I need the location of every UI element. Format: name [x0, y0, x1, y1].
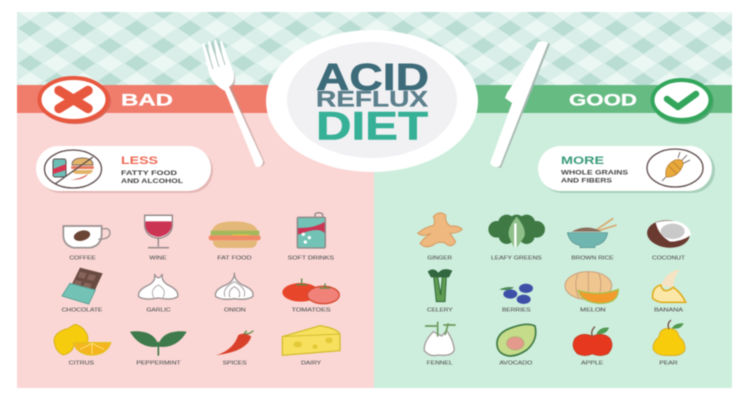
icon: apple: [573, 327, 612, 366]
icon: dairy: DAIRY: [301, 360, 322, 366]
icon: soft drink: [288, 213, 335, 262]
icon: soft drink: SOFT DRINKS: [288, 256, 335, 262]
icon: banana: [653, 269, 686, 313]
icon: garlic: GARLIC: [146, 307, 171, 313]
icon: peppermint: PEPPERMINT: [136, 360, 182, 366]
icon: brown rice: [567, 218, 617, 262]
title: [316, 57, 429, 148]
icon: berries: BERRIES: [502, 307, 531, 313]
icon: leafy greens: [488, 215, 545, 262]
plate: [266, 30, 478, 172]
title: ACID: [316, 57, 429, 99]
icon: burger: FAT FOOD: [217, 256, 252, 262]
less description: FATTY FOOD: [121, 170, 177, 177]
icon: banana: BANANA: [654, 307, 684, 313]
icon: ginger: [418, 213, 462, 262]
icon: celery: CELERY: [427, 307, 453, 313]
icon: dairy: [282, 326, 340, 366]
icon: coffee: COFFEE: [69, 256, 96, 262]
icon: leafy greens: LEAFY GREENS: [491, 256, 542, 262]
icon: crossed-out fatty food: [44, 150, 102, 188]
icon: knife: [490, 41, 550, 168]
panel: foods to avoid: [54, 213, 340, 366]
more heading: MORE: [561, 155, 604, 167]
icon: pear: PEAR: [659, 360, 678, 366]
callout: less: [36, 146, 213, 193]
icon: fennel: [424, 322, 456, 366]
icon: spices: SPICES: [223, 360, 247, 366]
icon: ginger: GINGER: [427, 256, 452, 262]
icon: coconut: [646, 219, 691, 262]
icon: tomatoes: [282, 278, 339, 313]
bad label: BAD: [121, 90, 173, 110]
icon: coconut: COCONUT: [652, 256, 686, 262]
icon: brown rice: BROWN RICE: [571, 256, 614, 262]
icon: citrus: [54, 324, 111, 366]
icon: fennel: FENNEL: [427, 360, 453, 366]
callout: more: [538, 146, 715, 193]
icon: apple: APPLE: [581, 360, 604, 366]
icon: fork: [202, 40, 265, 167]
icon: wine: [145, 215, 172, 262]
icon: avocado: [497, 324, 536, 366]
title: REFLUX: [316, 86, 428, 112]
icon: coffee: [63, 226, 110, 262]
icon: garlic: [138, 274, 178, 313]
icon: pear: [653, 320, 685, 366]
good label: GOOD: [569, 90, 637, 110]
more description: AND FIBERS: [561, 178, 613, 184]
icon: cross badge: [39, 78, 111, 124]
icon: wine: WINE: [149, 256, 167, 262]
icon: celery: [427, 269, 453, 313]
icon: berries: [499, 284, 533, 313]
panel: good side background: [374, 113, 732, 388]
icon: onion: ONION: [224, 307, 246, 313]
icon: onion: [215, 273, 253, 313]
panel: bad side background: [17, 113, 374, 388]
icon: melon: MELON: [580, 307, 606, 313]
icon: spices: [216, 331, 253, 366]
icon: chocolate: [62, 268, 103, 313]
tablecloth background: [17, 12, 732, 86]
icon: citrus: CITRUS: [69, 360, 95, 366]
less description: AND ALCOHOL: [121, 178, 183, 185]
bad banner: [17, 85, 374, 113]
panel: foods to favour: [418, 213, 691, 366]
more description: WHOLE GRAINS: [561, 170, 629, 176]
good banner: [374, 85, 732, 113]
title: DIET: [316, 104, 428, 148]
icon: chocolate: CHOCOLATE: [62, 307, 103, 313]
icon: tomatoes: TOMATOES: [292, 307, 331, 313]
icon: avocado: AVOCADO: [499, 360, 532, 366]
icon: burger: [209, 221, 261, 262]
icon: peppermint: [130, 331, 187, 366]
icon: wheat in circle: [647, 149, 703, 187]
icon: melon: [565, 272, 618, 313]
icon: check badge: [652, 80, 714, 124]
less heading: LESS: [121, 155, 158, 167]
